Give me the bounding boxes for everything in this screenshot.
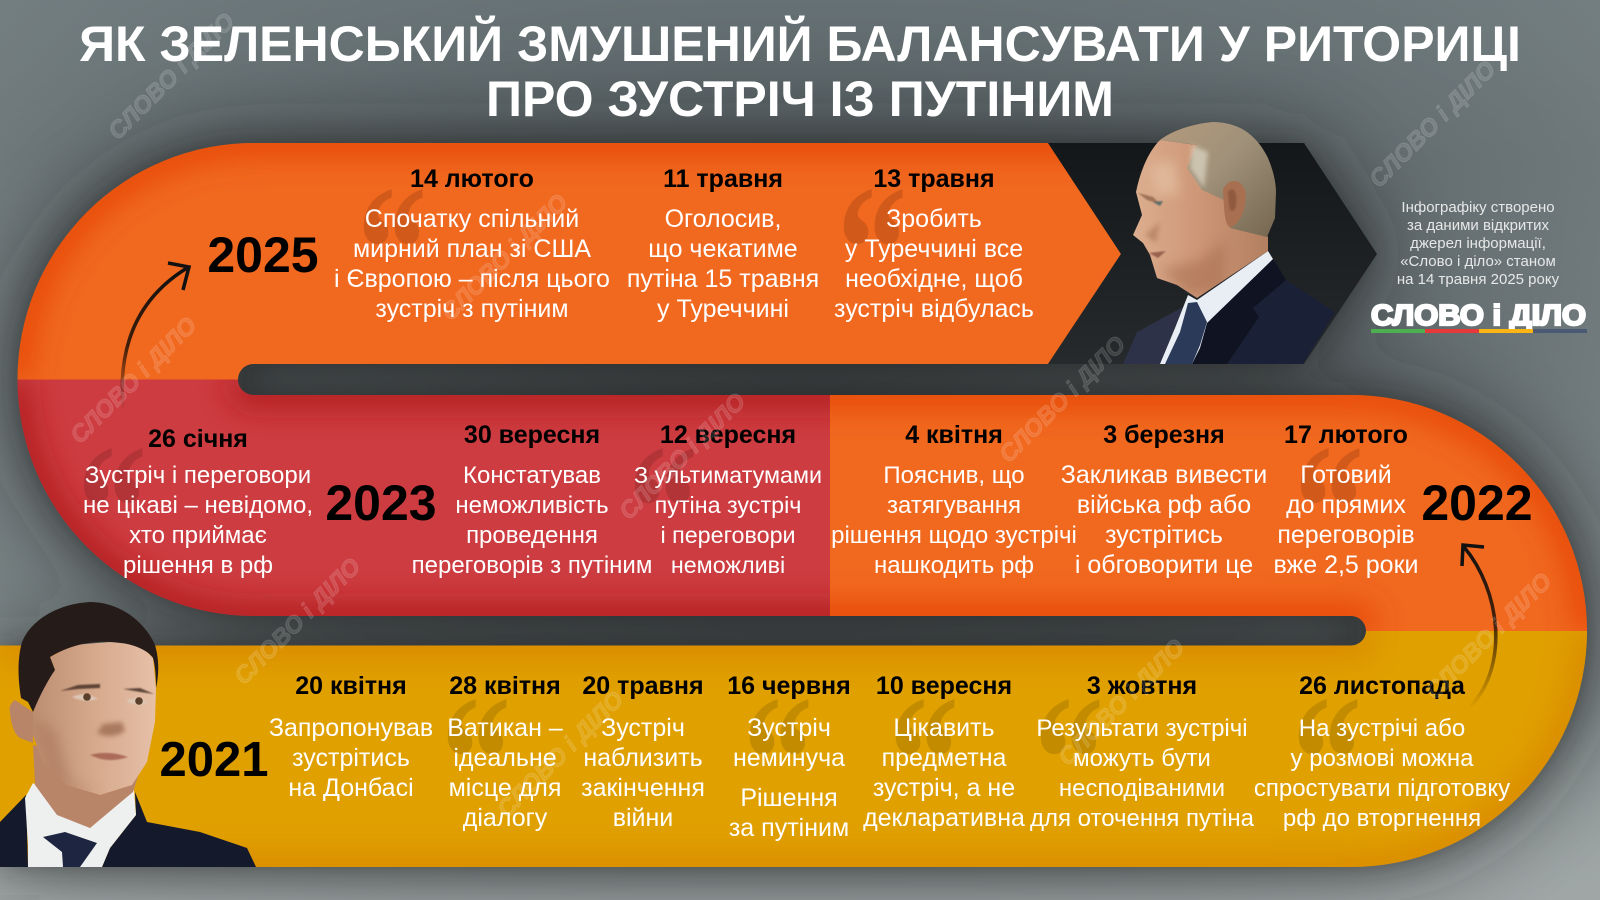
entry: 26 січня: хто приймає (129, 522, 267, 549)
entry: 14 лютого: 14 лютого (410, 165, 534, 193)
entry: 10 вересня: декларативна (863, 804, 1025, 832)
entry: 16 червня: за путіним (729, 814, 849, 842)
source credit (1397, 199, 1560, 288)
entry: 20 травня: Зустріч (601, 714, 685, 742)
watermarks: СЛОВО і ДІЛО (103, 8, 240, 145)
source credit: на 14 травня 2025 року (1397, 271, 1559, 288)
entry: 4 квітня: затягування (887, 492, 1021, 519)
ribbon segment: 2022 orange (800, 395, 1587, 631)
panel: 2023: “ (628, 408, 698, 610)
entry: 28 квітня: Ватикан – (447, 714, 563, 742)
entry: 3 березня: 3 березня (1103, 421, 1225, 449)
entry: 14 лютого: і Європою – після цього (334, 265, 610, 293)
entry: 17 лютого: Готовий (1300, 461, 1392, 489)
entry: 30 вересня: переговорів з путіним (412, 552, 652, 579)
entry: 16 червня: Рішення (740, 784, 838, 812)
entry: 20 травня: війни (613, 804, 673, 832)
entry: 16 червня: 16 червня (727, 672, 851, 700)
entry: 11 травня: путіна 15 травня (627, 265, 819, 293)
entry: 20 травня: наблизить (583, 744, 703, 772)
entry: 10 вересня: зустріч, а не (873, 774, 1015, 802)
entry: 4 квітня (831, 421, 1077, 579)
entry: 4 квітня: Пояснив, що (883, 462, 1025, 489)
panel: 2021: “ (743, 659, 813, 860)
title (79, 16, 1521, 127)
entry: 30 вересня: Констатував (463, 462, 601, 489)
entry: 14 лютого: Спочатку спільний (365, 205, 579, 233)
entry: 13 травня: Зробить (886, 205, 982, 233)
entry: 30 вересня: проведення (466, 522, 598, 549)
entry: 26 листопада: На зустрічі або (1299, 715, 1465, 742)
entry: 13 травня: необхідне, щоб (845, 265, 1023, 293)
entry: 4 квітня: рішення щодо зустрічі (831, 522, 1077, 549)
entry: 20 квітня: Запропонував (269, 714, 433, 742)
entry: 17 лютого: 17 лютого (1284, 421, 1408, 449)
entry: 16 червня (727, 672, 851, 842)
entry: 11 травня: у Туреччині (657, 295, 789, 323)
entry: 4 квітня: 4 квітня (905, 421, 1003, 449)
entry: 30 вересня: неможливість (455, 492, 609, 519)
entry: 10 вересня: Цікавить (893, 714, 995, 742)
entry: 20 квітня: 20 квітня (295, 672, 407, 700)
entry: 10 вересня: предметна (882, 744, 1006, 772)
ribbon segment: 2021 yellow (0, 631, 1587, 867)
entry: 12 вересня: З ультиматумами (634, 462, 822, 488)
logo: Слово і діло: СЛОВО і ДІЛО (1371, 300, 1586, 332)
entry: 3 березня: зустрітись (1105, 521, 1223, 549)
watermarks: СЛОВО і ДІЛО (1364, 56, 1501, 193)
ribbon segment: 2023 red (18, 380, 900, 616)
panel: 2023: “ (77, 408, 147, 610)
panel: 2022: “ (1294, 408, 1364, 610)
entry: 26 листопада: у розмові можна (1291, 745, 1473, 772)
entry: 17 лютого: вже 2,5 роки (1274, 551, 1418, 579)
panel: 2021 (159, 659, 1510, 860)
entry: 3 жовтня (1030, 672, 1254, 832)
entry: 3 березня: війська рф або (1077, 491, 1251, 519)
entry: 20 квітня (269, 672, 433, 802)
panel: 2025: “ (837, 149, 907, 350)
entry: 20 квітня: на Донбасі (288, 774, 414, 802)
entry: 17 лютого: переговорів (1277, 521, 1415, 549)
year 2021: 2021 (159, 733, 268, 787)
watermarks: СЛОВО і ДІЛО (994, 331, 1131, 468)
arrow: 2023 to 2025 (122, 263, 189, 408)
entry: 28 квітня: ідеальне (453, 744, 557, 772)
source credit: за даними відкритих (1407, 217, 1549, 234)
title: ПРО ЗУСТРІЧ ІЗ ПУТІНИМ (486, 71, 1114, 127)
panel: 2021: “ (889, 659, 959, 860)
entry: 26 листопада: спростувати підготовку (1254, 775, 1510, 802)
entry: 30 вересня: 30 вересня (464, 421, 600, 449)
entry: 3 жовтня: Результати зустрічі (1036, 715, 1248, 742)
entry: 28 квітня (447, 672, 563, 832)
panel: 2025 (207, 149, 1034, 350)
year 2025: 2025 (207, 227, 319, 283)
entry: 26 січня (83, 425, 313, 579)
entry: 28 квітня: діалогу (463, 804, 547, 832)
entry: 17 лютого (1274, 421, 1418, 579)
entry: 3 березня: і обговорити це (1075, 551, 1253, 579)
entry: 26 січня: 26 січня (148, 425, 248, 453)
panel: 2021: “ (1034, 659, 1104, 860)
portrait: putin (1123, 122, 1335, 364)
ribbon segment: 2025 orange (18, 143, 1200, 380)
entry: 13 травня: у Туреччині все (845, 235, 1023, 263)
entry: 3 березня (1061, 421, 1267, 579)
source credit: «Слово і діло» станом (1400, 253, 1556, 270)
source credit: Інфографіку створено (1401, 199, 1555, 216)
entry: 10 вересня (863, 672, 1025, 832)
watermarks: СЛОВО і ДІЛО (436, 189, 573, 326)
entry: 28 квітня: місце для (449, 774, 561, 802)
entry: 11 травня: що чекатиме (648, 235, 798, 263)
panel: 2025: “ (357, 149, 427, 350)
watermarks: СЛОВО і ДІЛО (229, 553, 366, 690)
entry: 11 травня: Оголосив, (665, 205, 781, 233)
watermarks: СЛОВО і ДІЛО (65, 312, 202, 449)
arrow: 2021 to 2022 (1462, 545, 1496, 707)
entry: 12 вересня: 12 вересня (660, 421, 796, 449)
watermarks: СЛОВО і ДІЛО (1420, 568, 1557, 705)
entry: 26 листопада: 26 листопада (1299, 672, 1465, 700)
portrait: zelensky (0, 602, 256, 867)
entry: 14 лютого: зустріч з путіним (375, 295, 569, 323)
entry: 12 вересня: неможливі (671, 552, 785, 578)
entry: 3 жовтня: можуть бути (1073, 745, 1211, 772)
entry: 10 вересня: 10 вересня (876, 672, 1012, 700)
watermarks: СЛОВО і ДІЛО (1053, 634, 1190, 771)
year 2022: 2022 (1421, 475, 1533, 531)
entry: 14 лютого (334, 165, 610, 323)
entry: 11 травня: 11 травня (663, 165, 783, 193)
entry: 3 березня: Закликав вивести (1061, 461, 1267, 489)
source credit: джерел інформації, (1410, 235, 1546, 252)
panel: 2022 (831, 408, 1533, 610)
entry: 13 травня: зустріч відбулась (834, 295, 1034, 323)
entry: 16 червня: неминуча (733, 744, 845, 772)
entry: 3 жовтня: 3 жовтня (1087, 672, 1197, 700)
entry: 3 жовтня: для оточення путіна (1030, 805, 1254, 832)
dark chevron behind portrait (1048, 143, 1377, 364)
panel: 2021: “ (441, 659, 511, 860)
entry: 28 квітня: 28 квітня (449, 672, 561, 700)
entry: 3 жовтня: несподіваними (1059, 775, 1225, 802)
watermarks: СЛОВО і ДІЛО (492, 686, 629, 823)
panel: 2023 (77, 408, 822, 610)
entry: 12 вересня: і переговори (660, 522, 796, 548)
watermarks: СЛОВО і ДІЛО (614, 388, 751, 525)
entry: 12 вересня (634, 421, 822, 578)
entry: 26 січня: рішення в рф (123, 552, 273, 579)
entry: 13 травня (834, 165, 1034, 323)
entry: 20 травня: 20 травня (582, 672, 704, 700)
entry: 17 лютого: до прямих (1286, 491, 1406, 519)
entry: 12 вересня: путіна зустріч (655, 492, 801, 518)
entry: 20 травня: закінчення (581, 774, 705, 802)
entry: 30 вересня (412, 421, 652, 579)
entry: 26 січня: не цікаві – невідомо, (83, 492, 313, 519)
panel: 2021: “ (1292, 659, 1362, 860)
entry: 26 листопада: рф до вторгнення (1283, 805, 1481, 832)
entry: 11 травня (627, 165, 819, 323)
title: ЯК ЗЕЛЕНСЬКИЙ ЗМУШЕНИЙ БАЛАНСУВАТИ У РИТОРИЦІ (79, 16, 1521, 72)
entry: 4 квітня: нашкодить рф (874, 552, 1034, 579)
entry: 20 квітня: зустрітись (292, 744, 410, 772)
entry: 13 травня: 13 травня (873, 165, 995, 193)
year 2023: 2023 (325, 475, 437, 531)
ribbon: soft shadow silhouette (0, 143, 1587, 867)
entry: 16 червня: Зустріч (747, 714, 831, 742)
entry: 26 січня: Зустріч і переговори (85, 462, 311, 489)
entry: 26 листопада (1254, 672, 1510, 832)
entry: 20 травня (581, 672, 705, 832)
entry: 14 лютого: мирний план зі США (353, 235, 591, 263)
